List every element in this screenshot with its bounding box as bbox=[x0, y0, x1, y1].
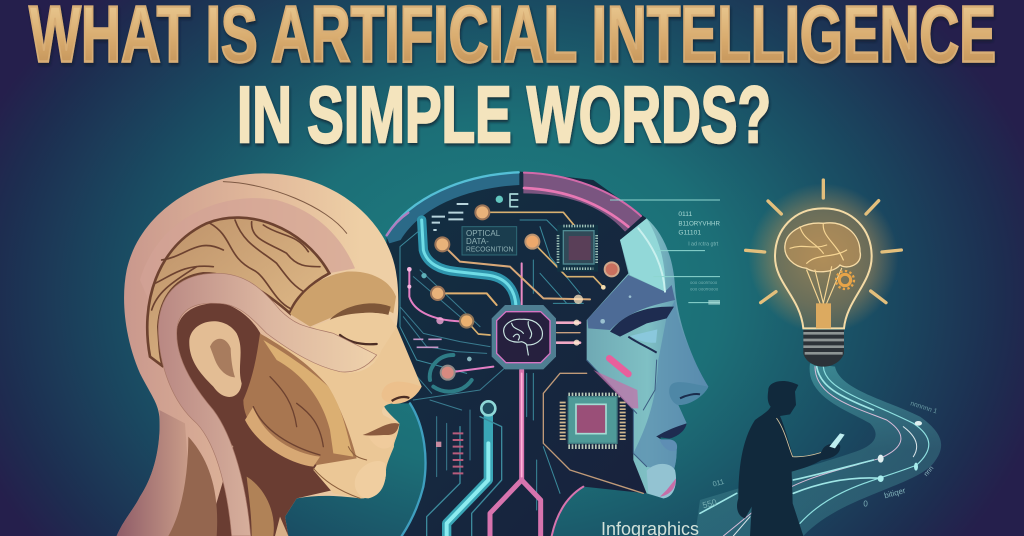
optical data recognition label box: DATA- bbox=[466, 237, 489, 246]
brow and eye bbox=[610, 307, 674, 337]
neck strands bbox=[168, 437, 217, 536]
optical data recognition label box: OPTICAL bbox=[466, 229, 501, 238]
robot head with circuit brain bbox=[380, 172, 720, 536]
title line 2: IN SIMPLE WORDS? bbox=[237, 70, 771, 159]
optical data recognition label box bbox=[462, 227, 517, 255]
chin bbox=[647, 464, 676, 498]
binary code annotations: ooo ooorrrooo bbox=[690, 280, 718, 285]
chin bbox=[355, 461, 386, 498]
walking person with phone silhouette bbox=[737, 381, 845, 536]
brain filament bbox=[785, 223, 860, 272]
data stream ribbon bbox=[695, 363, 941, 536]
binary code annotations: G11101 bbox=[678, 230, 701, 237]
dark muscle area bbox=[176, 303, 333, 536]
eye region bbox=[313, 313, 397, 373]
head silhouette bbox=[117, 173, 422, 536]
stream data points bbox=[915, 421, 922, 426]
binary code annotations: 0111 bbox=[678, 211, 692, 218]
nose bbox=[669, 382, 708, 405]
cyan visor bbox=[620, 218, 665, 292]
cheek stripe bbox=[609, 358, 628, 374]
title bbox=[29, 0, 996, 159]
binary code annotations: B11ORYVHHR bbox=[678, 220, 720, 227]
main face bbox=[267, 327, 422, 498]
light bulb idea icon bbox=[746, 180, 901, 367]
brain wavy grooves bbox=[152, 220, 320, 310]
cheek wood grain bbox=[243, 333, 357, 465]
forehead rivets bbox=[600, 319, 605, 324]
brow bbox=[330, 303, 391, 323]
binary code annotations bbox=[610, 200, 720, 305]
upper microchip bbox=[557, 225, 598, 272]
gold traces bbox=[442, 244, 590, 299]
filament stem bbox=[816, 303, 831, 328]
lower microchip bbox=[563, 395, 623, 447]
neck shading bbox=[117, 410, 188, 536]
blue skull band bbox=[386, 172, 519, 243]
lips bbox=[656, 423, 687, 439]
forehead tan band bbox=[290, 271, 396, 327]
nose bbox=[382, 382, 422, 404]
pink skull sweep bbox=[140, 198, 355, 303]
brain grooved region bbox=[147, 218, 329, 367]
pink skull band bbox=[523, 172, 642, 232]
rays bbox=[746, 180, 901, 303]
pink traces bbox=[409, 270, 460, 321]
outer back-of-head line bbox=[402, 403, 426, 536]
phone bbox=[829, 433, 845, 448]
robot face bbox=[587, 218, 708, 498]
face main plate bbox=[587, 218, 708, 498]
skull highlight line bbox=[223, 182, 347, 233]
jaw lines bbox=[313, 447, 367, 498]
bulb glow bbox=[748, 183, 898, 333]
robot head dark silhouette bbox=[380, 172, 680, 536]
lips bbox=[363, 423, 399, 435]
data stream ribbon: 550 bbox=[701, 497, 718, 510]
circuit traces bbox=[400, 194, 643, 536]
right face shading bbox=[633, 300, 708, 472]
data stream ribbon: nnn bbox=[923, 465, 936, 478]
icon: brain bbox=[504, 319, 542, 355]
sweeping pink band across head bbox=[158, 273, 377, 536]
binary code annotations: l ad rctra gtrt bbox=[688, 241, 719, 247]
data stream ribbon: 0 bbox=[863, 500, 868, 509]
optical data recognition label box: RECOGNITION bbox=[466, 244, 513, 253]
data stream ribbon: nnnnnn 1 bbox=[909, 400, 938, 416]
body rim light bbox=[777, 418, 821, 457]
binary code annotations: ooo ooorroooo bbox=[690, 287, 719, 292]
human head in wooden style bbox=[117, 173, 422, 536]
ear bbox=[189, 321, 242, 397]
central brain chip bbox=[492, 305, 556, 369]
stream micro labels: bitiqer bbox=[883, 486, 907, 500]
cheek panel lines bbox=[587, 360, 657, 467]
stream light lines bbox=[723, 367, 901, 536]
cyan traces bbox=[422, 220, 516, 307]
gear bbox=[839, 274, 851, 286]
forehead plate bbox=[587, 275, 675, 330]
data stream ribbon: 011 bbox=[712, 477, 725, 489]
circuit nodes bbox=[430, 205, 619, 415]
trace glow points bbox=[574, 295, 583, 304]
screw base bbox=[803, 330, 844, 367]
bulb glass bbox=[775, 208, 872, 328]
